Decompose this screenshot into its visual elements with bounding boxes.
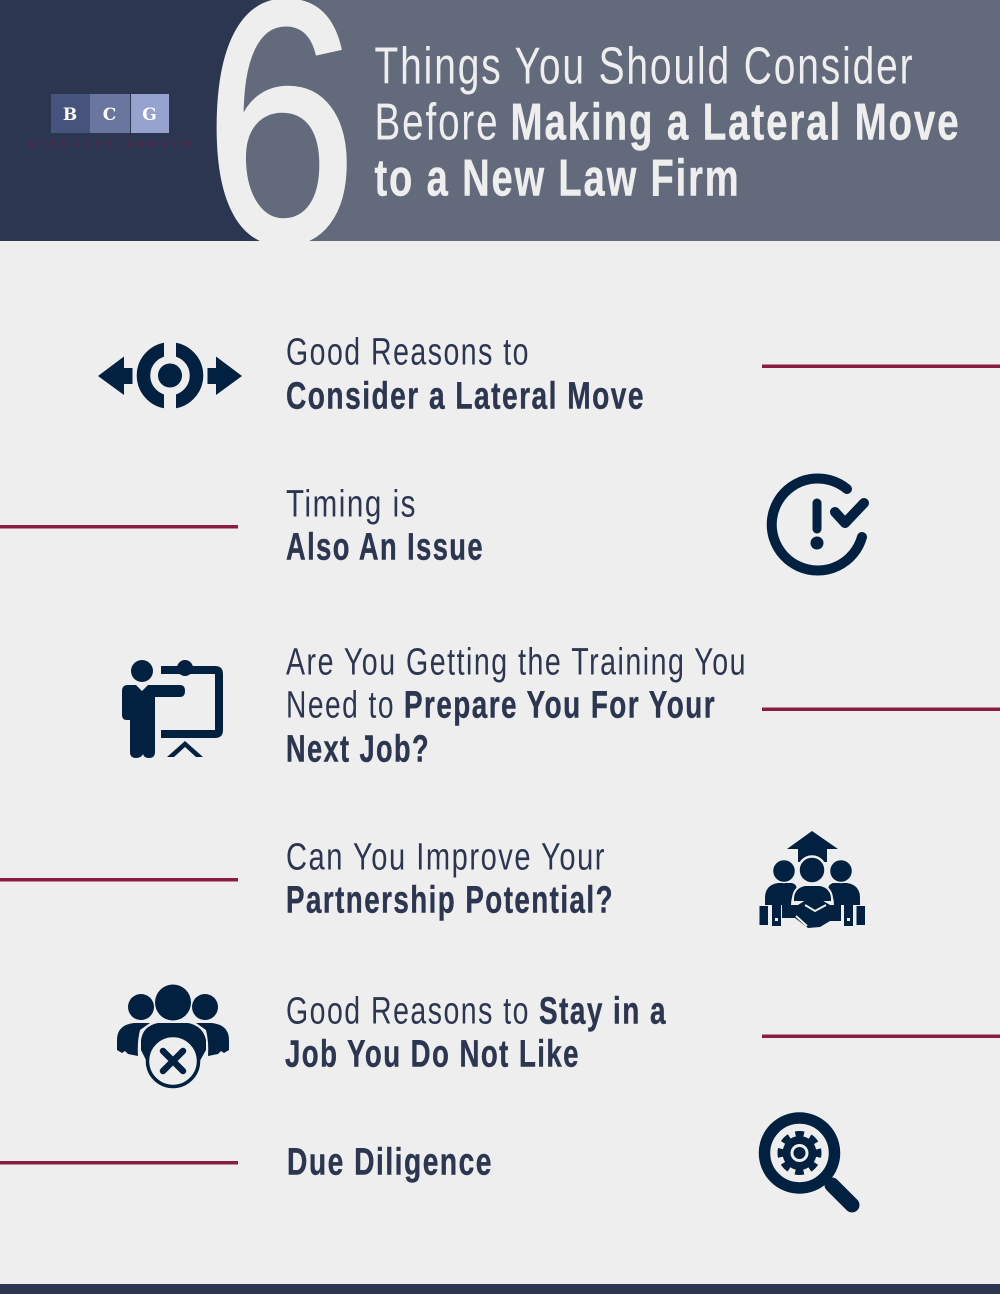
item 3 text: Are You Getting the Training You: [286, 642, 747, 684]
footer bar: [0, 1284, 1000, 1294]
item 4 icon: partners handshake with up arrow: [760, 831, 865, 928]
item 3 text: Prepare You For Your: [404, 684, 716, 726]
item 1 text: Consider a Lateral Move: [286, 376, 645, 418]
logo: BCG Attorney Search: C: [103, 105, 116, 125]
item 5 text: Good Reasons to: [286, 990, 530, 1032]
item 2 text: Also An Issue: [286, 526, 484, 568]
item 2 rule: [0, 525, 238, 528]
item 4 text: Can You Improve Your: [286, 836, 606, 878]
item 2 text: Timing is: [286, 484, 417, 526]
item 2 text: [286, 484, 484, 568]
item 2 icon: clock with check: [772, 478, 864, 570]
logo: BCG Attorney Search: ATTORNEY SEARCH: [28, 139, 190, 149]
item 6 icon: magnifier with gear: [764, 1118, 852, 1205]
item 5 text: Stay in a: [539, 990, 667, 1032]
logo: BCG Attorney Search: B: [63, 105, 77, 125]
logo: BCG Attorney Search: [28, 94, 190, 149]
item 1 icon: lateral arrows: [98, 340, 242, 411]
item 3 rule: [762, 708, 1000, 711]
item 3 text: Next Job?: [286, 728, 430, 770]
item 3 text: [286, 642, 747, 770]
item 6 text: Due Diligence: [287, 1142, 493, 1184]
title: [374, 38, 960, 208]
logo: BCG Attorney Search: G: [142, 105, 157, 125]
title: to a New Law Firm: [374, 150, 740, 208]
item 4 rule: [0, 878, 238, 882]
header banner: [0, 0, 1000, 241]
item 3 text: Need to: [286, 684, 395, 726]
item 1 rule: [762, 364, 1000, 368]
item 5 text: [285, 990, 667, 1076]
item 4 text: [286, 836, 614, 922]
item 6 rule: [0, 1161, 238, 1164]
item 5 icon: group with X: [117, 984, 229, 1086]
item 4 text: Partnership Potential?: [286, 880, 614, 922]
item 3 icon: presenter at board: [122, 660, 223, 758]
item 5 rule: [762, 1034, 1000, 1038]
item 1 text: [286, 332, 645, 418]
item 5 text: Job You Do Not Like: [285, 1034, 580, 1076]
title: Before: [374, 94, 500, 152]
item 1 text: Good Reasons to: [286, 332, 530, 374]
